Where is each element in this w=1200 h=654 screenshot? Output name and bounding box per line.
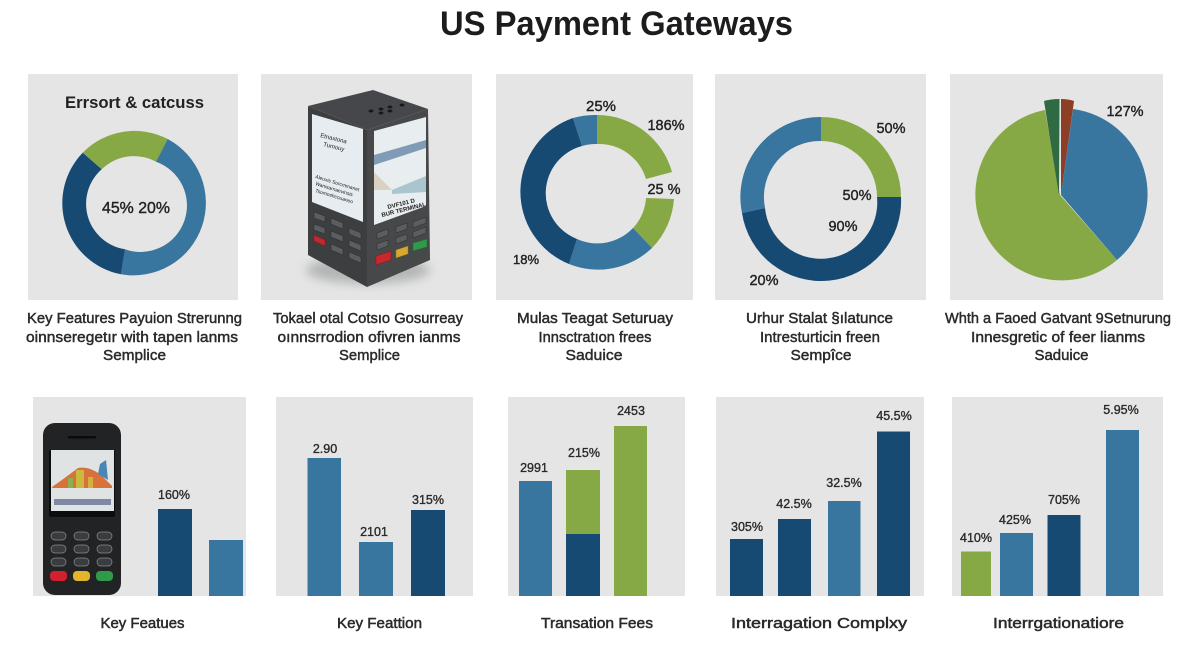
caption 1: oinnseregetır with tapen lanms	[26, 330, 238, 346]
bottom labels: Key Featues	[100, 615, 184, 632]
captions row 1	[26, 311, 1171, 364]
bar value: 160%	[158, 488, 190, 502]
bar values: 315%	[412, 493, 444, 507]
panel: bar chart 3	[508, 397, 685, 596]
bar values: 2101	[360, 525, 388, 539]
caption 3: Mulas Teagat Seturuay	[517, 311, 674, 327]
terminal body	[308, 90, 430, 287]
terminal speaker holes	[368, 104, 404, 114]
donut 3 values: 50%	[876, 121, 906, 137]
donut 1 value: 45% 20%	[102, 200, 170, 217]
bar values: 45.5%	[876, 409, 912, 423]
title: US Payment Gateways	[440, 5, 793, 43]
icon: handheld terminal	[43, 423, 121, 595]
caption 4: Sempîce	[790, 348, 852, 364]
bottom labels: Transation Fees	[541, 615, 653, 632]
panel: donut chart 3	[715, 74, 926, 300]
bars	[158, 509, 243, 596]
terminal right screen: DVF101 D	[387, 198, 416, 211]
panel: donut chart 1	[28, 74, 238, 300]
donut 2 values: 186%	[647, 118, 685, 134]
caption 4: Intresturticin freen	[760, 330, 880, 346]
heading: donut 1: Errsort & catcuss	[65, 93, 204, 112]
bar values: 215%	[568, 446, 600, 460]
bar values: 305%	[731, 520, 763, 534]
terminal right keypad	[376, 217, 427, 265]
caption 2: oınnsrrodion ofivren ianms	[278, 330, 460, 346]
pie slices	[975, 99, 1148, 280]
bars	[308, 458, 445, 596]
terminal shadow	[306, 256, 430, 284]
caption 5: Saduice	[1034, 348, 1088, 364]
bottom labels: Interragation Complxy	[731, 615, 908, 632]
caption 1: Semplice	[103, 348, 166, 364]
bar values	[313, 442, 444, 539]
terminal right screen: BUR TERMINAL	[381, 202, 427, 219]
terminal left screen: Tumouy	[323, 142, 345, 153]
donut 3 values	[749, 121, 906, 289]
panel: bar chart 4	[716, 397, 924, 596]
bar values: 2453	[617, 404, 645, 418]
panel: payment terminal illustration	[261, 74, 472, 300]
bar values: 2991	[520, 461, 548, 475]
terminal left keypad	[314, 212, 361, 263]
bottom labels: Key Feattion	[337, 615, 422, 632]
donut 2 values: 25 %	[647, 182, 681, 198]
donut ring 2	[520, 115, 674, 270]
donut 3 values: 50%	[842, 188, 872, 204]
terminal left screen	[312, 114, 363, 222]
donut 2 values: 25%	[586, 98, 616, 115]
terminal left screen: Wanisarnaevinsis	[314, 181, 354, 198]
bottom labels: Interrgationatiore	[993, 615, 1124, 632]
bars	[730, 432, 910, 596]
panel: bar chart 5	[952, 397, 1163, 596]
bar values	[520, 404, 645, 475]
caption 5	[945, 311, 1171, 364]
donut 2 values: 18%	[513, 252, 539, 267]
donut 2 values	[513, 98, 685, 267]
panel: donut chart 2	[496, 74, 693, 300]
bars	[961, 430, 1139, 596]
caption 2: Semplice	[339, 348, 400, 364]
panel: pie chart	[950, 74, 1163, 300]
bar values	[731, 409, 912, 534]
donut ring 3	[740, 117, 901, 281]
terminal left screen: Tsomoshcnuaneo	[314, 188, 354, 205]
bar values: 2.90	[313, 442, 337, 456]
bar values: 705%	[1048, 493, 1080, 507]
caption 1	[26, 311, 242, 364]
caption 4: Urhur Stalat §ılatunce	[746, 311, 893, 327]
bar values: 5.95%	[1103, 403, 1139, 417]
caption 3: Saduice	[566, 348, 622, 364]
caption 4	[746, 311, 893, 364]
donut 3 values: 90%	[828, 219, 858, 235]
caption 3	[517, 311, 674, 364]
bar values: 425%	[999, 513, 1031, 527]
donut ring 1	[62, 131, 206, 275]
bottom labels	[100, 615, 1124, 632]
bar values: 42.5%	[776, 497, 812, 511]
bar values	[960, 403, 1139, 545]
caption 5: Innesgretic of feer lianms	[971, 330, 1145, 346]
panel: bar chart 1 with phone terminal	[33, 397, 246, 596]
bar values: 32.5%	[826, 476, 862, 490]
panel: bar chart 2	[276, 397, 473, 596]
caption 5: Whth a Faoed Gatvant 9Setnurung	[945, 311, 1171, 327]
bars	[519, 426, 647, 596]
caption 1: Key Features Payuion Strerunng	[27, 311, 242, 327]
caption 2	[273, 311, 464, 364]
terminal left screen: Etnaxtona	[320, 133, 348, 146]
donut 3 values: 20%	[749, 273, 779, 289]
pie value: 127%	[1106, 104, 1144, 120]
caption 2: Tokael otal Cotsıo Gosurreay	[273, 311, 464, 327]
terminal right screen	[374, 117, 427, 225]
terminal left screen: Aleuxis Sorcmmanet	[314, 174, 361, 193]
bar values: 410%	[960, 531, 992, 545]
caption 3: Innsctratıon frees	[538, 330, 652, 346]
